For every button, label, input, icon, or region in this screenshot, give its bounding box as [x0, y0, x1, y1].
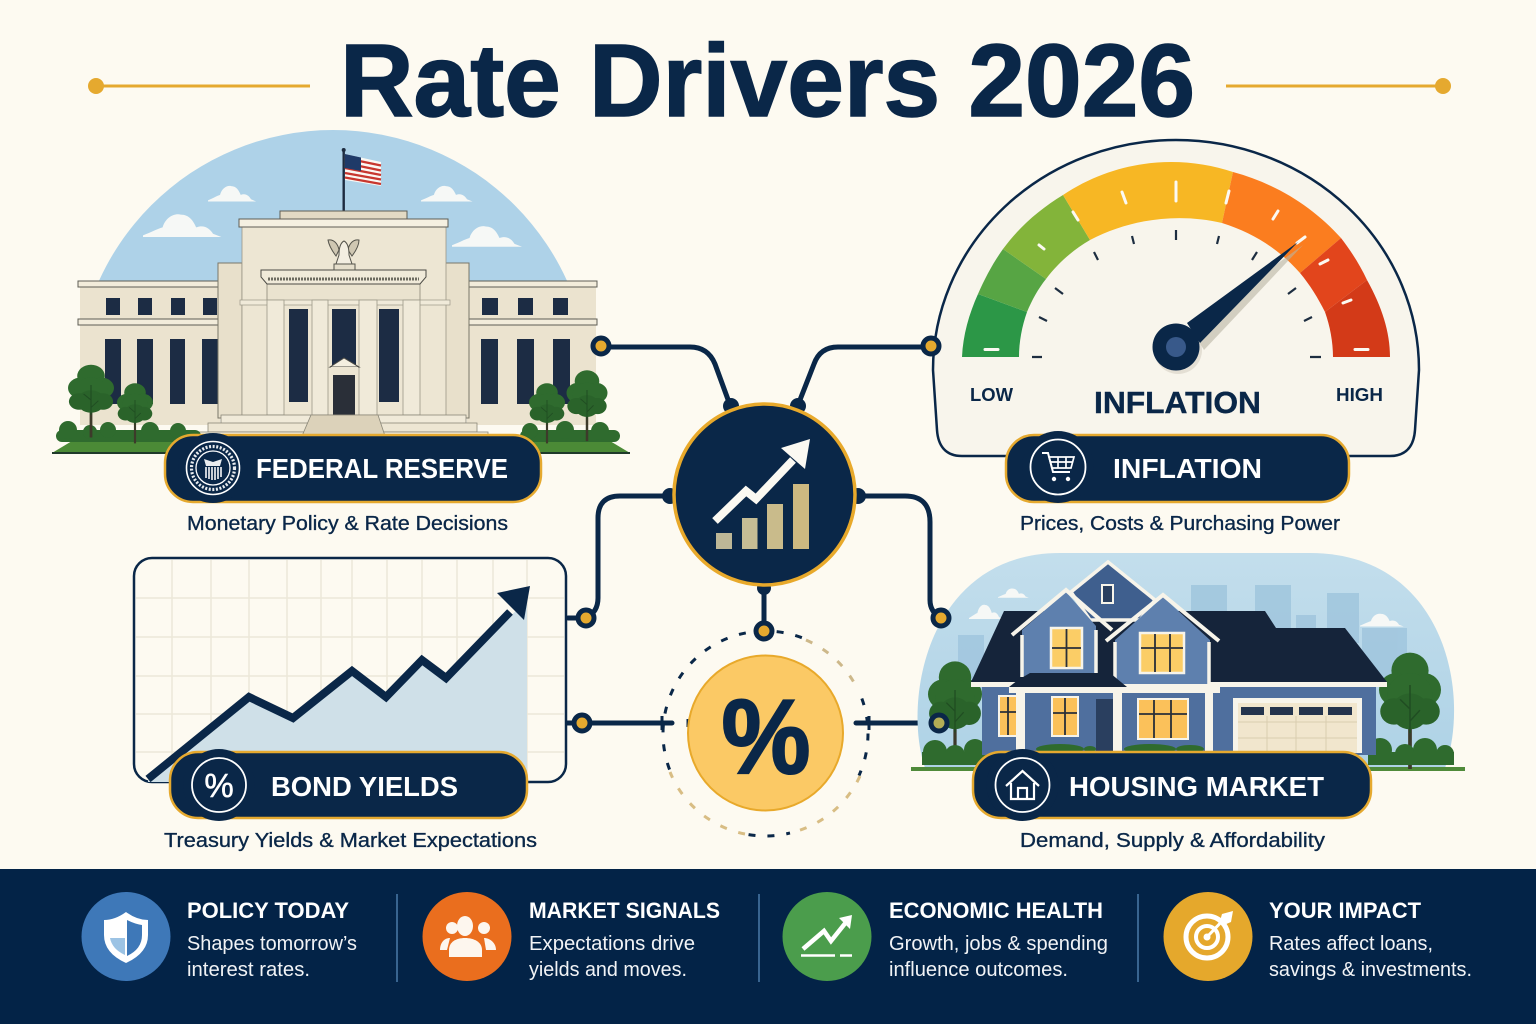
yield area — [148, 600, 527, 782]
description: Growth, jobs & spending — [889, 932, 1108, 955]
node: inflation — [923, 338, 939, 354]
rising arrow — [715, 439, 810, 521]
dashed ring — [663, 631, 868, 836]
node: rate dial top — [756, 623, 772, 639]
footer band — [0, 869, 1536, 1024]
heading: YOUR IMPACT — [1269, 898, 1422, 923]
panel: housing market — [911, 553, 1465, 852]
bushes — [922, 738, 1454, 765]
seal icon — [178, 433, 248, 503]
gauge arc segments — [962, 162, 1390, 357]
ground line — [52, 452, 630, 454]
description: yields and moves. — [529, 958, 687, 981]
badge label: BOND YIELDS — [271, 771, 458, 802]
subtitle: Monetary Policy & Rate Decisions — [187, 512, 508, 535]
title rule left — [88, 78, 310, 94]
description: influence outcomes. — [889, 958, 1068, 981]
node: housing upper — [933, 610, 949, 626]
badge: bond yields — [170, 749, 527, 821]
node: housing lower — [931, 715, 947, 731]
percent icon — [183, 749, 255, 821]
badge: federal reserve — [165, 433, 541, 503]
description: interest rates. — [187, 958, 310, 981]
gauge title: INFLATION — [1094, 385, 1261, 420]
percent disc — [688, 656, 843, 810]
badge: inflation — [1006, 431, 1349, 503]
badge label: HOUSING MARKET — [1069, 771, 1324, 802]
footer item: market signals — [422, 892, 720, 981]
house — [971, 562, 1387, 755]
description — [187, 932, 357, 981]
eagle emblem — [328, 240, 359, 270]
clouds — [143, 186, 522, 247]
central hub icon — [674, 404, 855, 585]
description: savings & investments. — [1269, 958, 1472, 981]
connector network — [567, 347, 1002, 730]
icon: growth chart — [782, 892, 872, 981]
node: bond yields lower — [574, 715, 590, 731]
rising bars — [716, 484, 809, 549]
node: bond yields upper — [578, 610, 594, 626]
description — [1269, 932, 1472, 981]
flag — [338, 148, 381, 219]
trees — [68, 365, 608, 443]
white ticks — [985, 182, 1368, 350]
description — [889, 932, 1108, 981]
high label: HIGH — [1336, 384, 1383, 405]
clouds — [969, 589, 1404, 626]
yield arrowhead — [497, 586, 530, 620]
badge: housing market — [973, 749, 1371, 821]
panel: inflation gauge — [933, 140, 1419, 535]
footer item: economic health — [782, 892, 1108, 981]
description — [529, 932, 695, 981]
panel: federal reserve — [52, 130, 630, 534]
percent icon: % — [204, 767, 234, 804]
icon: target — [1164, 892, 1252, 981]
footer item: your impact — [1164, 892, 1472, 981]
description: Expectations drive — [529, 932, 695, 955]
percent dial — [663, 631, 868, 836]
gauge housing — [933, 140, 1419, 456]
trees — [928, 653, 1441, 769]
sky dome — [99, 130, 567, 280]
city skyline — [958, 585, 1407, 695]
ground — [52, 441, 630, 453]
heading: POLICY TODAY — [187, 898, 349, 923]
building — [78, 211, 597, 438]
badge label: INFLATION — [1113, 453, 1262, 484]
subtitle: Demand, Supply & Affordability — [1020, 829, 1326, 852]
node: federal reserve — [593, 338, 609, 354]
description: Shapes tomorrow’s — [187, 932, 357, 955]
percent symbol: % — [722, 678, 810, 796]
dark ticks — [1032, 230, 1321, 357]
needle — [1152, 242, 1303, 374]
ground — [911, 767, 1465, 771]
icon: people — [422, 892, 512, 981]
subtitle: Treasury Yields & Market Expectations — [164, 829, 537, 852]
hedges — [56, 421, 620, 442]
badge label: FEDERAL RESERVE — [256, 453, 508, 484]
heading: ECONOMIC HEALTH — [889, 898, 1103, 923]
cart icon — [1022, 431, 1094, 503]
title rule right — [1226, 78, 1451, 94]
yield line — [148, 612, 510, 779]
chart frame — [134, 558, 566, 782]
heading: MARKET SIGNALS — [529, 898, 720, 923]
house icon — [986, 749, 1058, 821]
description: Rates affect loans, — [1269, 932, 1433, 955]
title: Rate Drivers 2026 — [340, 23, 1195, 138]
subtitle: Prices, Costs & Purchasing Power — [1020, 512, 1340, 535]
icon: shield — [82, 892, 170, 981]
low label: LOW — [970, 384, 1014, 405]
footer item: policy today — [82, 892, 357, 981]
sky backdrop — [918, 553, 1454, 768]
panel: bond yields — [134, 558, 566, 852]
